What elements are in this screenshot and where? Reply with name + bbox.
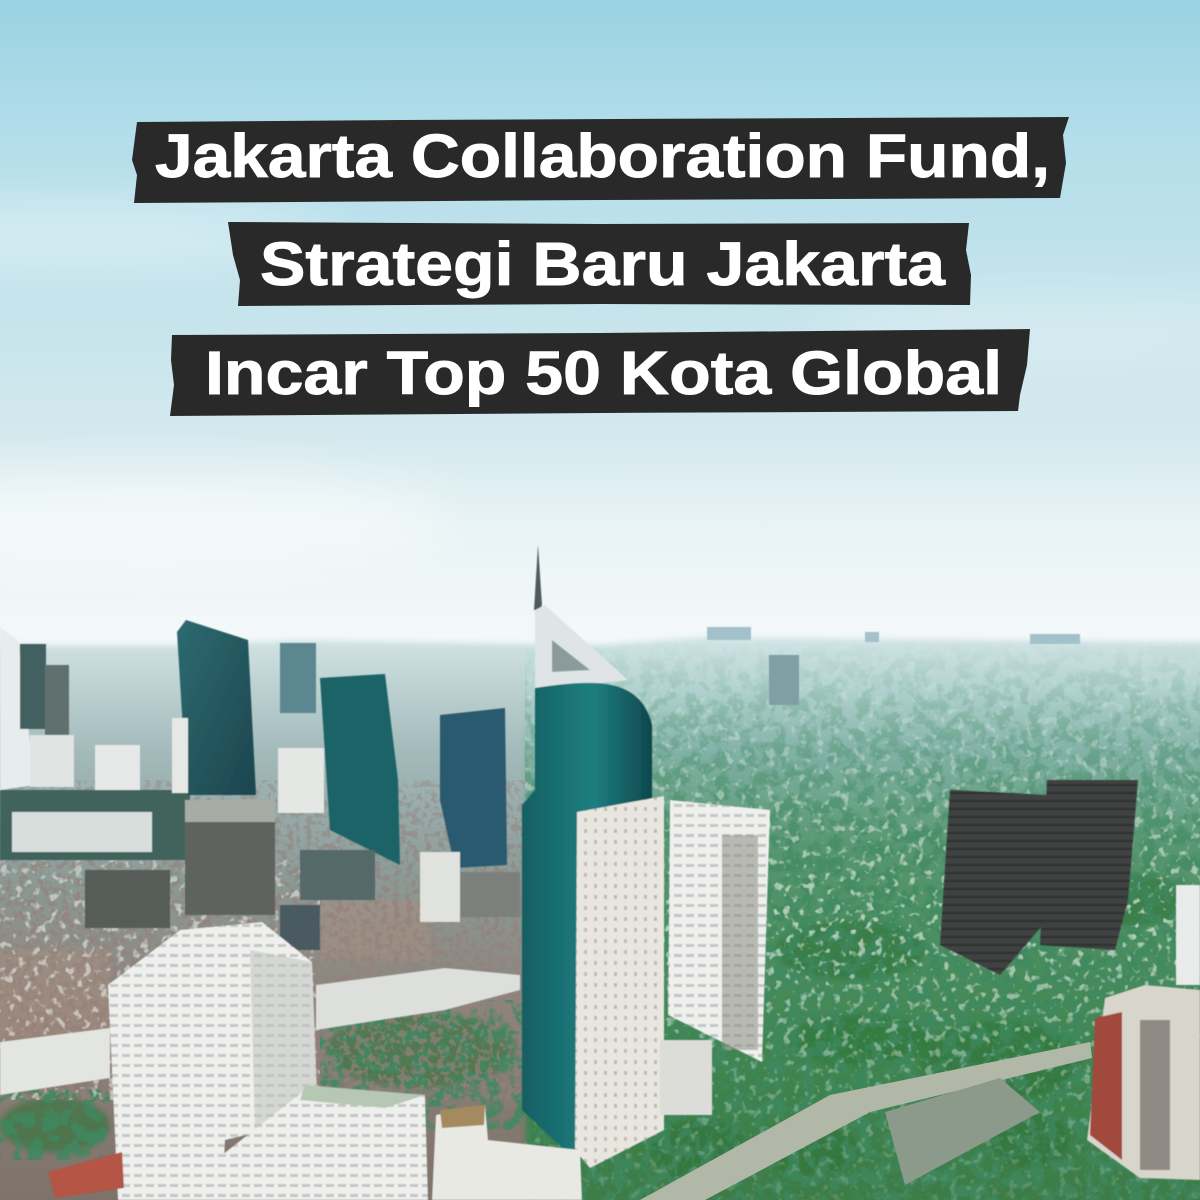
building: spire	[534, 545, 542, 610]
background: sky	[0, 0, 1200, 700]
building: right red tower	[1087, 985, 1200, 1180]
buildings: far left towers	[0, 627, 35, 790]
building: main tower white facade	[575, 796, 664, 1168]
building: teal glass tower	[320, 674, 400, 865]
building: low white roof strip	[316, 968, 520, 1030]
building: blue glass tower	[440, 708, 507, 868]
title: line 2	[228, 222, 971, 306]
building: white foreground roof	[222, 1090, 428, 1200]
road through the park	[640, 1042, 1092, 1200]
building: construction tower	[185, 800, 275, 915]
building: tall dark glass tower	[177, 620, 256, 795]
building: large white hotel foreground	[108, 922, 318, 1200]
texture: dense roofs	[0, 780, 525, 1100]
tennis court	[48, 1152, 124, 1198]
building: white tower beside main	[668, 800, 770, 1062]
clouds	[0, 207, 1200, 570]
title: line 1: Jakarta Collaboration Fund,	[155, 122, 1050, 190]
texture: tree canopy	[0, 640, 1200, 1200]
title: line 3	[170, 329, 1030, 416]
title: line 1	[132, 117, 1069, 203]
building: main tower glass	[522, 683, 652, 1160]
cityscape photo	[0, 545, 1200, 1200]
parking area	[885, 1078, 1040, 1185]
ground and greenery	[0, 637, 1200, 1200]
texture: pale rooftops	[525, 640, 1200, 1200]
title: line 3: Incar Top 50 Kota Global	[205, 339, 1002, 407]
buildings: twin dark towers	[940, 790, 1047, 975]
buildings: skyline far	[707, 627, 1080, 644]
building: distant tower	[769, 655, 799, 705]
title: line 2: Strategi Baru Jakarta	[260, 230, 946, 298]
greens: right park	[0, 874, 1190, 1180]
building: mall	[0, 790, 190, 860]
ground: left dense district	[0, 645, 525, 1200]
